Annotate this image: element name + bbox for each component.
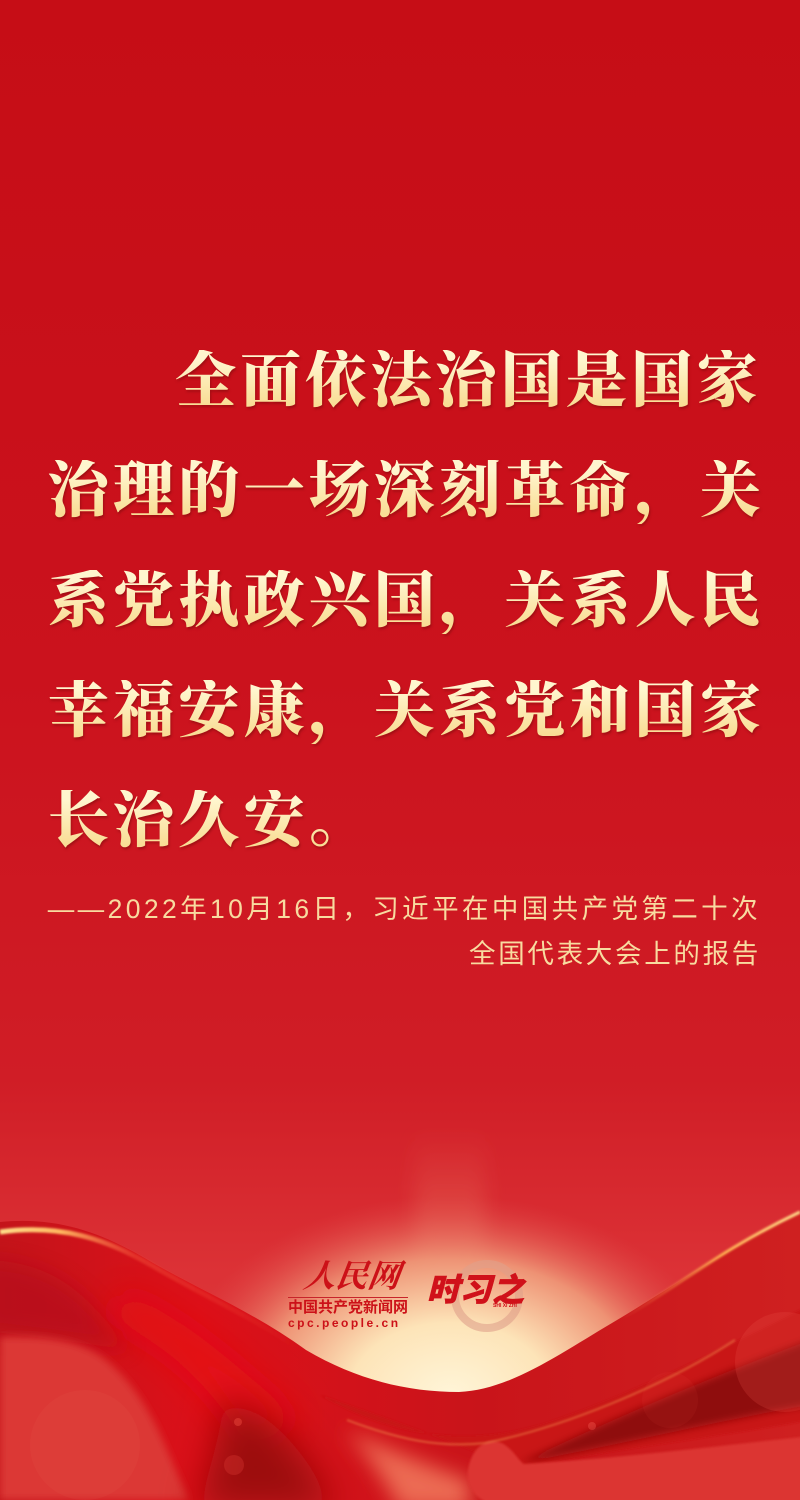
gold edges — [0, 1230, 300, 1350]
background with ribbons — [0, 897, 800, 1500]
lower left fold — [0, 1337, 189, 1500]
upper left dark band — [0, 1266, 118, 1348]
orange lower glow — [345, 1430, 470, 1500]
logo: shi xi zhi — [427, 1260, 527, 1332]
main ribbon — [0, 1212, 800, 1500]
dark centre column — [195, 1400, 335, 1500]
lower right fold — [468, 1436, 800, 1500]
quote line 3: 系党执政兴国，关系人民 — [48, 568, 765, 635]
attribution line 2: 全国代表大会上的报告 — [469, 939, 761, 969]
bright centre band — [115, 1302, 271, 1408]
logo subtitle: 中国共产党新闻网 — [288, 1299, 408, 1316]
quote line 5: 长治久安。 — [48, 788, 374, 855]
logo script name: 人民网 — [301, 1258, 403, 1294]
bokeh circles — [735, 1312, 800, 1412]
quote line 2: 治理的一场深刻革命，关 — [48, 458, 765, 525]
under valley band — [338, 1310, 800, 1454]
logo ring — [451, 1260, 523, 1332]
logo pinyin: SHI XI ZHI — [493, 1303, 517, 1309]
quote line 1: 全面依法治国是国家 — [175, 348, 762, 415]
logo url: cpc.people.cn — [288, 1316, 401, 1330]
dark lip — [520, 1340, 800, 1463]
attribution line 1: ——2022年10月16日，习近平在中国共产党第二十次 — [48, 894, 761, 924]
logo name: 时习之 — [427, 1272, 525, 1308]
logo: people's daily cpc — [288, 1258, 408, 1330]
quote line 4: 幸福安康，关系党和国家 — [48, 678, 765, 745]
